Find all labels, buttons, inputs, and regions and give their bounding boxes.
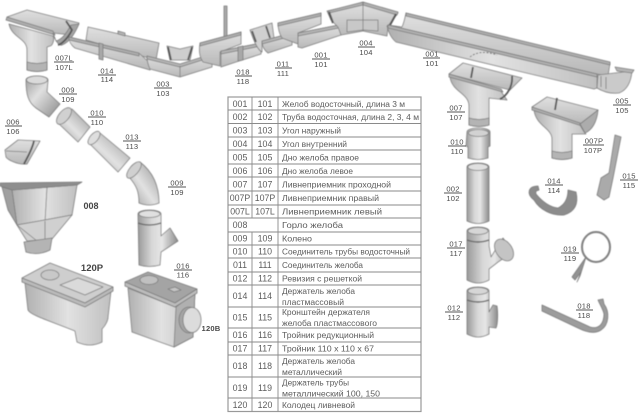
label 001 left — [312, 50, 330, 69]
row 018: 018 — [233, 361, 247, 371]
row 003 — [233, 126, 341, 136]
row 007 — [233, 180, 391, 190]
label 001 right: 001 — [425, 50, 439, 58]
row 019: Держатель трубы — [282, 378, 349, 388]
label 005: 105 — [615, 106, 629, 115]
label 006: 006 — [6, 118, 20, 126]
row 001: 101 — [258, 99, 272, 109]
row 007L — [230, 206, 382, 216]
row 015 — [233, 307, 377, 328]
pipe 002 — [467, 163, 489, 224]
label 010 left — [88, 108, 106, 127]
label 007P: 107P — [584, 146, 602, 155]
label 004: 004 — [359, 38, 373, 48]
label 004: 104 — [359, 48, 373, 57]
label 010 left: 110 — [91, 118, 103, 127]
row 004: 104 — [258, 139, 272, 149]
label 018 top — [235, 68, 252, 86]
row 009: 109 — [258, 234, 272, 244]
label 007L: 107L — [55, 63, 73, 72]
label 005 — [613, 96, 631, 115]
inner corner 004 — [327, 2, 398, 36]
label 018 top: 118 — [237, 77, 249, 86]
connector 010 — [466, 128, 490, 160]
label 014 — [98, 66, 116, 84]
row 002: Труба водосточная, длина 2, 3, 4 м — [282, 112, 419, 122]
label 011: 011 — [277, 60, 289, 68]
row 018: металлический — [282, 367, 342, 377]
label 002: 002 — [446, 184, 460, 194]
row 011: Соединитель желоба — [282, 260, 363, 270]
row 016: Тройник редукционный — [282, 330, 374, 340]
row 009 — [233, 234, 312, 244]
label 007: 107 — [449, 113, 463, 122]
label 011 — [275, 60, 292, 78]
elbow 009 upper — [26, 76, 60, 117]
row 012: 112 — [258, 274, 272, 284]
tee 012 — [467, 287, 498, 337]
label 007P — [583, 136, 604, 155]
connector 011 — [250, 23, 292, 53]
row 015: Кронштейн держателя — [282, 307, 370, 317]
metal bracket 018 — [542, 299, 608, 332]
row 004 — [233, 139, 347, 149]
row 017: 117 — [258, 344, 272, 354]
row 012: Ревизия с решеткой — [282, 274, 362, 284]
tee 017 — [467, 227, 513, 283]
label 014: 014 — [100, 66, 114, 76]
row 001: Желоб водосточный, длина 3 м — [282, 99, 405, 109]
label 002: 102 — [446, 194, 460, 203]
row 014: 014 — [233, 291, 247, 301]
label 014: 114 — [101, 75, 113, 84]
label 014 right: 014 — [547, 176, 561, 186]
row 015: 115 — [258, 312, 272, 322]
label 012: 112 — [448, 313, 460, 322]
label 006: 106 — [6, 127, 20, 136]
label 018 right — [576, 302, 593, 320]
label 003 — [154, 80, 172, 98]
row 006: 006 — [233, 166, 247, 176]
row 120: 120 — [233, 400, 247, 410]
row 007: 107 — [258, 180, 272, 190]
label 001 right — [423, 50, 440, 68]
row 120: Колодец ливневой — [282, 400, 355, 410]
label 120B: 120B — [202, 324, 221, 333]
label 120P: 120P — [81, 263, 104, 274]
row 011: 111 — [258, 260, 272, 270]
row 005: 105 — [258, 152, 272, 162]
label 013 — [123, 132, 141, 151]
row 007: Ливнеприемник проходной — [282, 180, 391, 190]
parts table — [228, 97, 421, 412]
row 002: 002 — [233, 112, 247, 122]
label 017: 017 — [449, 240, 463, 248]
label 015: 015 — [622, 172, 636, 180]
row 014: пластмассовый — [282, 297, 344, 307]
label 016: 116 — [177, 270, 189, 280]
row 008: 008 — [233, 220, 247, 230]
label 018 top: 018 — [236, 68, 250, 76]
label 010 right: 010 — [450, 138, 464, 146]
label 003: 103 — [156, 89, 170, 98]
label 015: 115 — [623, 181, 635, 190]
row 017 — [233, 344, 374, 354]
bracket strut 118 — [224, 6, 227, 37]
row 007: 007 — [233, 180, 247, 190]
row 011: 011 — [233, 260, 247, 270]
end cap 006 — [5, 140, 40, 164]
label 010 left: 010 — [90, 108, 104, 118]
row 007L: 107L — [255, 206, 275, 216]
row 014: 114 — [258, 291, 272, 301]
part number labels — [5, 38, 638, 333]
label 017 — [447, 240, 465, 258]
label 009 lower: 109 — [170, 188, 184, 197]
label 013: 113 — [126, 142, 138, 151]
elbow 009 lower — [124, 159, 159, 205]
row 006 — [233, 166, 353, 176]
row 003: 103 — [258, 126, 272, 136]
label 019: 119 — [564, 254, 576, 263]
storm well 120B — [125, 272, 201, 347]
label 018 right: 018 — [577, 302, 591, 310]
row 007L: 007L — [230, 206, 250, 216]
gutter section 001 left — [278, 13, 341, 48]
row 010: 110 — [258, 246, 272, 256]
row 018: 118 — [258, 361, 272, 371]
label 007: 007 — [449, 104, 463, 112]
label 003: 003 — [156, 80, 170, 88]
label 017: 117 — [450, 249, 462, 258]
label 009 upper: 009 — [61, 86, 75, 94]
row 014: Держатель желоба — [282, 286, 355, 296]
row 003: 003 — [233, 126, 247, 136]
row 018 — [233, 356, 355, 377]
funnel 007L — [6, 10, 79, 72]
label 001 right: 101 — [425, 59, 439, 68]
row 015: 015 — [233, 312, 247, 322]
funnel neck 008 — [0, 182, 82, 254]
row 004: Угол внутренний — [282, 139, 347, 149]
row 008: Горло желоба — [282, 220, 343, 230]
pipe clamp 019 — [572, 232, 610, 282]
downpipe parts column — [466, 128, 517, 337]
row 019 — [233, 378, 380, 398]
label 009 upper: 109 — [61, 95, 75, 104]
label 010 right — [448, 138, 466, 156]
corner 003 — [147, 46, 212, 77]
row 007P: Ливнеприемник правый — [282, 193, 379, 203]
label 009 upper — [59, 86, 77, 104]
label 016 — [174, 262, 192, 280]
row 018: Держатель желоба — [282, 356, 355, 366]
row 009: 009 — [233, 234, 247, 244]
label 012: 012 — [447, 304, 461, 312]
label 002 — [444, 184, 462, 203]
row 007L: Ливнеприемник левый — [282, 206, 382, 216]
label 006 — [5, 118, 22, 136]
row 120 — [233, 400, 355, 410]
label 012 — [445, 304, 463, 322]
label 007L: 007L — [55, 54, 73, 62]
row 019: 019 — [233, 383, 247, 393]
holder 014 — [529, 186, 577, 215]
row 005: 005 — [233, 152, 247, 162]
row 016: 016 — [233, 330, 247, 340]
row 006: 106 — [258, 166, 272, 176]
label 018 right: 118 — [578, 311, 590, 320]
row 004: 004 — [233, 139, 247, 149]
funnel 007P — [532, 97, 598, 160]
row 016 — [233, 330, 374, 340]
label 007L — [54, 54, 74, 72]
label 014 right: 114 — [548, 186, 560, 195]
row 015: желоба пластмассового — [282, 318, 377, 328]
row 009: Колено — [282, 234, 312, 244]
label 001 left: 001 — [314, 50, 328, 60]
bracket 015 — [597, 135, 621, 200]
row 002: 102 — [258, 112, 272, 122]
label 007 — [447, 104, 465, 122]
label 008: 008 — [83, 201, 99, 211]
row 017: Тройник 110 х 110 х 67 — [282, 344, 374, 354]
label 014 right — [545, 176, 563, 195]
label 004 — [358, 38, 375, 57]
row 005 — [233, 152, 359, 162]
label 010 right: 110 — [451, 147, 463, 156]
funnel 007 — [449, 63, 522, 126]
long gutter section 001 right with end cap 005 — [387, 13, 634, 93]
storm well 120P — [22, 263, 113, 345]
row 010: 010 — [233, 246, 247, 256]
row 012: 012 — [233, 274, 247, 284]
label 011: 111 — [277, 69, 289, 78]
row 010: Соединитель трубы водосточный — [282, 246, 410, 256]
row 120: 120 — [258, 400, 272, 410]
gutter holder section 014 — [69, 27, 159, 70]
row 011 — [233, 260, 363, 270]
row 012 — [233, 274, 362, 284]
row 007P: 007P — [230, 193, 250, 203]
label 005: 005 — [615, 96, 629, 106]
row 017: 017 — [233, 344, 247, 354]
gutter section 018 — [199, 32, 261, 67]
connector 010 left — [54, 105, 90, 142]
row 005: Дно желоба правое — [282, 152, 359, 162]
row 003: Угол наружный — [282, 126, 341, 136]
label 019: 019 — [563, 244, 577, 254]
label 001 left: 101 — [314, 60, 328, 69]
row 016: 116 — [258, 330, 272, 340]
row 019: 119 — [258, 383, 272, 393]
label 013: 013 — [125, 132, 139, 142]
tee 016 — [138, 210, 178, 266]
label 009 lower: 009 — [170, 178, 184, 188]
row 019: металлический 100, 150 — [282, 388, 380, 398]
label 016: 016 — [176, 262, 190, 270]
row 006: Дно желоба левое — [282, 166, 353, 176]
row 008 — [233, 220, 343, 230]
label 015 — [620, 172, 638, 190]
row 001: 001 — [233, 99, 247, 109]
row 014 — [233, 286, 355, 307]
pipe 013 — [86, 129, 130, 172]
label 007P: 007P — [585, 136, 603, 146]
row 007P: 107P — [255, 193, 275, 203]
label 019 — [561, 244, 579, 263]
label 009 lower — [168, 178, 186, 197]
row 007P — [230, 193, 379, 203]
